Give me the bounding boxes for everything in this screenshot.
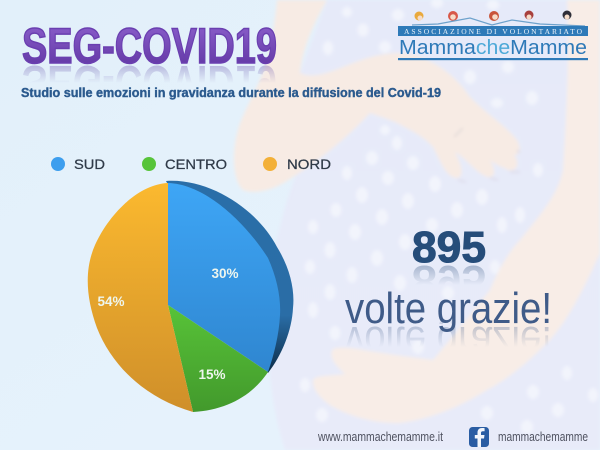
slice: SUD 30%	[168, 183, 280, 372]
icon: facebook	[469, 427, 489, 447]
legend item: CENTRO: CENTRO	[165, 156, 227, 172]
legend item: CENTRO	[142, 156, 227, 172]
slice: NORD 54%	[88, 183, 193, 412]
number 895	[412, 223, 486, 305]
pie labels: 54%	[97, 294, 125, 309]
legend	[51, 156, 331, 172]
pie chart	[88, 181, 293, 412]
pie labels: 30%	[211, 266, 239, 281]
subtitle: Studio sulle emozioni in gravidanza durante la diffusione del Covid-19	[21, 85, 441, 100]
title reflection: SEG-COVID19	[22, 55, 277, 111]
logo heads	[412, 10, 585, 26]
pie labels: 15%	[198, 367, 226, 382]
volte grazie text: volte grazie!	[345, 284, 552, 333]
number 895: 895	[412, 223, 486, 272]
pie labels	[97, 266, 239, 382]
volte grazie text	[345, 284, 552, 366]
upper arm and hand	[234, 0, 520, 192]
right arm and lower hand	[313, 0, 600, 423]
volte grazie reflection: volte grazie!	[345, 317, 552, 366]
title: SEG-COVID19	[22, 18, 277, 74]
legend item: NORD	[263, 156, 331, 172]
dress dots	[300, 0, 598, 434]
pie side	[166, 181, 293, 373]
logo banner	[398, 26, 588, 36]
895 reflection: 895	[412, 256, 486, 305]
title	[22, 18, 277, 111]
slice: CENTRO 15%	[168, 305, 268, 412]
logo: Associazione di Volontariato MammacheMamme	[398, 10, 588, 60]
dress	[268, 0, 600, 450]
legend item: SUD: SUD	[74, 156, 105, 172]
background photo: pregnant woman	[234, 0, 600, 450]
ring	[454, 128, 463, 137]
finger shadows	[458, 150, 520, 182]
legend item: NORD: NORD	[287, 156, 331, 172]
logo: Associazione di Volontariato MammacheMamme: ASSOCIAZIONE DI VOLONTARIATO	[404, 27, 583, 36]
logo name: MammacheMamme	[399, 37, 587, 59]
legend item: SUD	[51, 156, 105, 172]
website: www.mammachemamme.it	[317, 429, 443, 444]
